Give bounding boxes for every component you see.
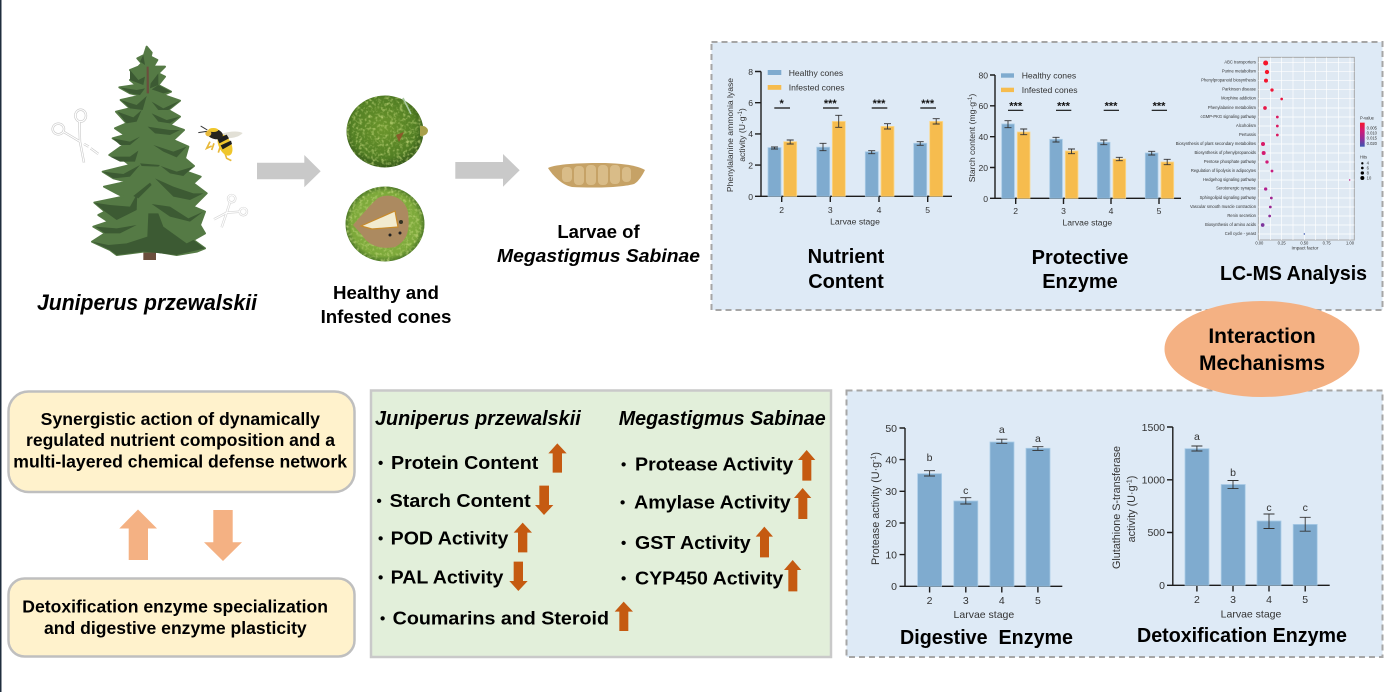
- chart: glutathione S-transferase activity: 2: [1194, 594, 1200, 606]
- list: plant traits: PAL Activity: [391, 566, 504, 587]
- list: insect traits: •: [621, 571, 626, 588]
- chart: phenylalanine ammonia lyase: 2: [779, 205, 784, 215]
- left edge line: [0, 0, 2, 692]
- chart: phenylalanine ammonia lyase: -1: [738, 110, 744, 116]
- chart: glutathione S-transferase activity: Glutathione S-transferase: [1111, 446, 1123, 569]
- chart: starch content: 20: [978, 163, 988, 173]
- chart: phenylalanine ammonia lyase: 5: [925, 205, 930, 215]
- chart: glutathione S-transferase activity: activity (U·g: [1126, 485, 1138, 542]
- heading: protective enzyme: Enzyme: [1042, 271, 1118, 293]
- chart: phenylalanine ammonia lyase: *: [780, 98, 785, 110]
- heading: detoxification enzyme: Detoxification Enzyme: [1137, 625, 1347, 647]
- label: healthy and infested cones: Healthy and: [333, 282, 439, 303]
- chart: starch content: ***: [1057, 100, 1071, 112]
- chart: starch content: 2: [1013, 206, 1018, 216]
- chart: protease activity: [870, 423, 1062, 621]
- panel: yellow box detoxification: [8, 578, 354, 656]
- chart: starch content: Infested cones: [1022, 85, 1078, 95]
- chart: LC-MS pathway bubble plot: Hedgehog signaling pathway: [1203, 177, 1257, 182]
- heading: nutrient content: Nutrient: [808, 246, 885, 268]
- chart: LC-MS pathway bubble plot: Pentose phosphate pathway: [1204, 159, 1257, 164]
- heading: digestive enzyme: Digestive Enzyme: [900, 627, 1073, 649]
- list: plant traits: •: [376, 493, 382, 510]
- chart: LC-MS pathway bubble plot: Biosynthesis of plant secondary metabolites: [1176, 141, 1256, 146]
- list: plant traits: Starch Content: [390, 490, 531, 511]
- list: plant traits: [376, 452, 609, 629]
- callout: interaction mechanisms: [1164, 301, 1360, 397]
- chart: protease activity: 20: [885, 518, 897, 530]
- chart: starch content: ***: [1105, 100, 1118, 112]
- chart: LC-MS pathway bubble plot: Serotonergic synapse: [1216, 186, 1257, 191]
- chart: protease activity: a: [1035, 433, 1041, 445]
- chart: starch content: 40: [978, 132, 988, 142]
- chart: phenylalanine ammonia lyase: 4: [748, 129, 753, 139]
- chart: LC-MS pathway bubble plot: Phenylalanine metabolism: [1208, 105, 1257, 110]
- chart: glutathione S-transferase activity: ): [1126, 476, 1138, 479]
- heading: Megastigmus Sabinae: Megastigmus Sabinae: [619, 408, 826, 430]
- chart: phenylalanine ammonia lyase: ***: [873, 98, 886, 110]
- chart: phenylalanine ammonia lyase: ***: [921, 98, 935, 110]
- chart: glutathione S-transferase activity: a: [1194, 431, 1200, 443]
- chart: phenylalanine ammonia lyase: 2: [748, 160, 753, 170]
- chart: protease activity: 40: [885, 454, 897, 466]
- list: insect traits: GST Activity: [635, 532, 752, 553]
- label: larvae of Megastigmus Sabinae: [497, 221, 700, 266]
- chart: LC-MS pathway bubble plot: cGMP-PKG signaling pathway: [1201, 114, 1257, 119]
- chart: starch content: 5: [1157, 206, 1162, 216]
- arrows: trend indicators: [509, 443, 815, 631]
- panel: yellow box synergistic action: Synergistic action of dynamically: [41, 409, 320, 429]
- chart: protease activity: ): [870, 452, 882, 456]
- chart: starch content: ***: [1009, 100, 1023, 112]
- chart: glutathione S-transferase activity: 1000: [1142, 474, 1165, 486]
- chart: LC-MS pathway bubble plot: Renin secretion: [1227, 213, 1257, 218]
- chart: glutathione S-transferase activity: -1: [1126, 479, 1134, 485]
- panel: yellow box synergistic action: [8, 392, 354, 492]
- chart: LC-MS pathway bubble plot: Alcoholism: [1236, 123, 1257, 128]
- chart: protease activity: Larvae stage: [954, 609, 1014, 621]
- list: insect traits: •: [620, 495, 625, 512]
- chart: LC-MS pathway bubble plot: 0.50: [1300, 241, 1309, 246]
- chart: phenylalanine ammonia lyase: 6: [748, 98, 753, 108]
- chart: glutathione S-transferase activity: c: [1303, 502, 1308, 514]
- panel: top analyses: [712, 42, 1382, 310]
- chart: LC-MS pathway bubble plot: Purine metabolism: [1222, 69, 1257, 74]
- chart: LC-MS pathway bubble plot: 0.005: [1367, 125, 1378, 130]
- chart: LC-MS pathway bubble plot: Hits: [1360, 154, 1367, 159]
- chart: starch content: 4: [1109, 206, 1114, 216]
- list: plant traits: Protein Content: [391, 452, 538, 473]
- list: plant traits: POD Activity: [391, 527, 509, 548]
- icon: wasp: [198, 126, 243, 161]
- chart: phenylalanine ammonia lyase: [725, 67, 952, 226]
- chart: glutathione S-transferase activity: 4: [1266, 594, 1272, 606]
- callout: interaction mechanisms: Interaction: [1208, 325, 1316, 348]
- list: plant traits: •: [378, 455, 383, 472]
- chart: LC-MS pathway bubble plot: 0.25: [1278, 241, 1286, 246]
- list: insect traits: •: [621, 535, 626, 552]
- chart: LC-MS pathway bubble plot: P-value: [1360, 116, 1375, 121]
- chart: LC-MS pathway bubble plot: [1176, 57, 1378, 250]
- chart: LC-MS pathway bubble plot: Regulation of lipolysis in adipocytes: [1191, 168, 1256, 173]
- chart: starch content: 60: [978, 101, 988, 111]
- chart: glutathione S-transferase activity: [1111, 422, 1330, 620]
- callout: interaction mechanisms: Mechanisms: [1199, 352, 1325, 375]
- panel: bottom enzyme charts: [846, 390, 1382, 657]
- chart: LC-MS pathway bubble plot: Biosynthesis of phenylpropanoids: [1195, 150, 1256, 155]
- chart: glutathione S-transferase activity: c: [1266, 502, 1272, 514]
- chart: protease activity: 50: [885, 423, 897, 435]
- panel: yellow box synergistic action: regulated nutrient composition and a: [26, 430, 335, 450]
- chart: phenylalanine ammonia lyase: 8: [748, 67, 753, 77]
- chart: glutathione S-transferase activity: 500: [1147, 527, 1165, 539]
- label: Juniperus przewalskii: Juniperus przewalskii: [37, 290, 258, 315]
- chart: phenylalanine ammonia lyase: Healthy cones: [789, 68, 843, 78]
- chart: starch content: 3: [1061, 206, 1066, 216]
- chart: LC-MS pathway bubble plot: 8: [1367, 170, 1370, 175]
- chart: LC-MS pathway bubble plot: 0.00: [1255, 241, 1264, 246]
- chart: starch content: Larvae stage: [1062, 218, 1112, 228]
- list: plant traits: •: [378, 530, 383, 547]
- panel: yellow box detoxification: Detoxification enzyme specialization: [22, 597, 328, 617]
- chart: glutathione S-transferase activity: 1500: [1142, 422, 1165, 434]
- chart: starch content: ***: [1153, 100, 1166, 112]
- list: plant traits: •: [380, 611, 385, 628]
- label: larvae of Megastigmus Sabinae: Larvae of: [557, 221, 640, 242]
- heading: Juniperus przewalskii: Juniperus przewalskii: [375, 408, 581, 430]
- chart: LC-MS pathway bubble plot: 10: [1367, 175, 1372, 180]
- chart: starch content: 80: [978, 70, 988, 80]
- chart: phenylalanine ammonia lyase: Phenylalanine ammonia lyase: [725, 78, 735, 192]
- chart: phenylalanine ammonia lyase: 4: [877, 205, 882, 215]
- chart: starch content: [967, 70, 1181, 228]
- chart: protease activity: b: [927, 452, 933, 464]
- list: insect traits: Protease Activity: [635, 454, 794, 475]
- list: insect traits: Amylase Activity: [634, 492, 792, 513]
- chart: protease activity: 4: [999, 595, 1005, 607]
- icon: scissors left: [53, 110, 98, 163]
- chart: protease activity: -1: [870, 455, 878, 462]
- arrow: down: [204, 510, 242, 561]
- chart: starch content: Starch content (mg·g: [967, 102, 977, 182]
- illustration: infested cone: [346, 186, 424, 262]
- chart: protease activity: 10: [885, 550, 897, 562]
- panel: green summary: [371, 390, 831, 657]
- chart: glutathione S-transferase activity: 3: [1230, 594, 1236, 606]
- chart: starch content: Healthy cones: [1022, 70, 1076, 80]
- chart: protease activity: 3: [963, 595, 969, 607]
- list: insect traits: CYP450 Activity: [635, 568, 784, 589]
- label: larvae of Megastigmus Sabinae: Megastigmus Sabinae: [497, 245, 700, 266]
- chart: LC-MS pathway bubble plot: Cell cycle - yeast: [1225, 231, 1257, 236]
- chart: glutathione S-transferase activity: Larvae stage: [1221, 608, 1282, 620]
- chart: LC-MS pathway bubble plot: 4: [1367, 161, 1370, 166]
- chart: starch content: -1: [968, 96, 974, 102]
- icon: scissors right: [214, 195, 247, 227]
- chart: glutathione S-transferase activity: 0: [1159, 580, 1165, 592]
- chart: protease activity: 2: [927, 595, 933, 607]
- chart: LC-MS pathway bubble plot: 0.015: [1367, 135, 1378, 140]
- arrow: tree to cones: [257, 155, 321, 187]
- chart: LC-MS pathway bubble plot: 6: [1367, 165, 1370, 170]
- illustration: larva: [548, 163, 645, 188]
- heading: nutrient content: Content: [808, 271, 884, 293]
- panel: yellow box detoxification: and digestive enzyme plasticity: [44, 618, 307, 638]
- chart: LC-MS pathway bubble plot: Parkinson disease: [1222, 87, 1257, 92]
- chart: phenylalanine ammonia lyase: activity (U·g: [737, 116, 747, 162]
- chart: protease activity: 0: [891, 581, 897, 593]
- chart: glutathione S-transferase activity: b: [1230, 467, 1236, 479]
- chart: LC-MS pathway bubble plot: Pertussis: [1239, 132, 1256, 137]
- heading: protective enzyme: Protective: [1032, 247, 1128, 269]
- chart: protease activity: 5: [1035, 595, 1041, 607]
- arrow: cones to larvae: [455, 154, 520, 187]
- chart: LC-MS pathway bubble plot: Impact factor: [1292, 245, 1319, 250]
- chart: protease activity: c: [963, 485, 968, 497]
- chart: starch content: ): [967, 94, 977, 97]
- list: insect traits: [620, 454, 794, 589]
- chart: phenylalanine ammonia lyase: 0: [748, 192, 753, 202]
- chart: LC-MS pathway bubble plot: 0.020: [1367, 141, 1378, 146]
- chart: LC-MS pathway bubble plot: 0.75: [1323, 241, 1331, 246]
- chart: protease activity: a: [999, 424, 1005, 436]
- chart: protease activity: Protease activity (U·g: [870, 462, 882, 565]
- chart: phenylalanine ammonia lyase: Infested cones: [789, 82, 845, 92]
- chart: phenylalanine ammonia lyase: 3: [828, 205, 833, 215]
- chart: starch content: 0: [983, 194, 988, 204]
- chart: protease activity: 30: [885, 486, 897, 498]
- label: healthy and infested cones: Infested cones: [321, 306, 451, 327]
- panel: yellow box synergistic action: multi-layered chemical defense network: [13, 451, 347, 471]
- illustration: healthy cone: [346, 96, 428, 168]
- chart: phenylalanine ammonia lyase: Larvae stage: [830, 216, 880, 226]
- list: plant traits: Coumarins and Steroid: [393, 608, 609, 629]
- chart: LC-MS pathway bubble plot: Phenylpropanoid biosynthesis: [1201, 78, 1256, 83]
- chart: LC-MS pathway bubble plot: Sphingolipid signaling pathway: [1200, 195, 1257, 200]
- chart: phenylalanine ammonia lyase: ): [737, 108, 747, 111]
- heading: LC-MS analysis: LC-MS Analysis: [1220, 263, 1367, 285]
- list: insect traits: •: [621, 457, 626, 474]
- chart: LC-MS pathway bubble plot: ABC transporters: [1224, 60, 1256, 65]
- chart: LC-MS pathway bubble plot: Biosynthesis of amino acids: [1205, 222, 1256, 227]
- chart: LC-MS pathway bubble plot: 1.00: [1346, 241, 1355, 246]
- chart: phenylalanine ammonia lyase: ***: [824, 98, 837, 110]
- chart: LC-MS pathway bubble plot: Vascular smooth muscle contraction: [1190, 204, 1257, 209]
- list: plant traits: •: [378, 569, 383, 586]
- chart: LC-MS pathway bubble plot: Morphine addiction: [1221, 96, 1257, 101]
- chart: LC-MS pathway bubble plot: 0.010: [1367, 130, 1378, 135]
- arrow: up: [119, 510, 157, 560]
- illustration: juniper tree: [92, 47, 207, 260]
- chart: glutathione S-transferase activity: 5: [1302, 594, 1308, 606]
